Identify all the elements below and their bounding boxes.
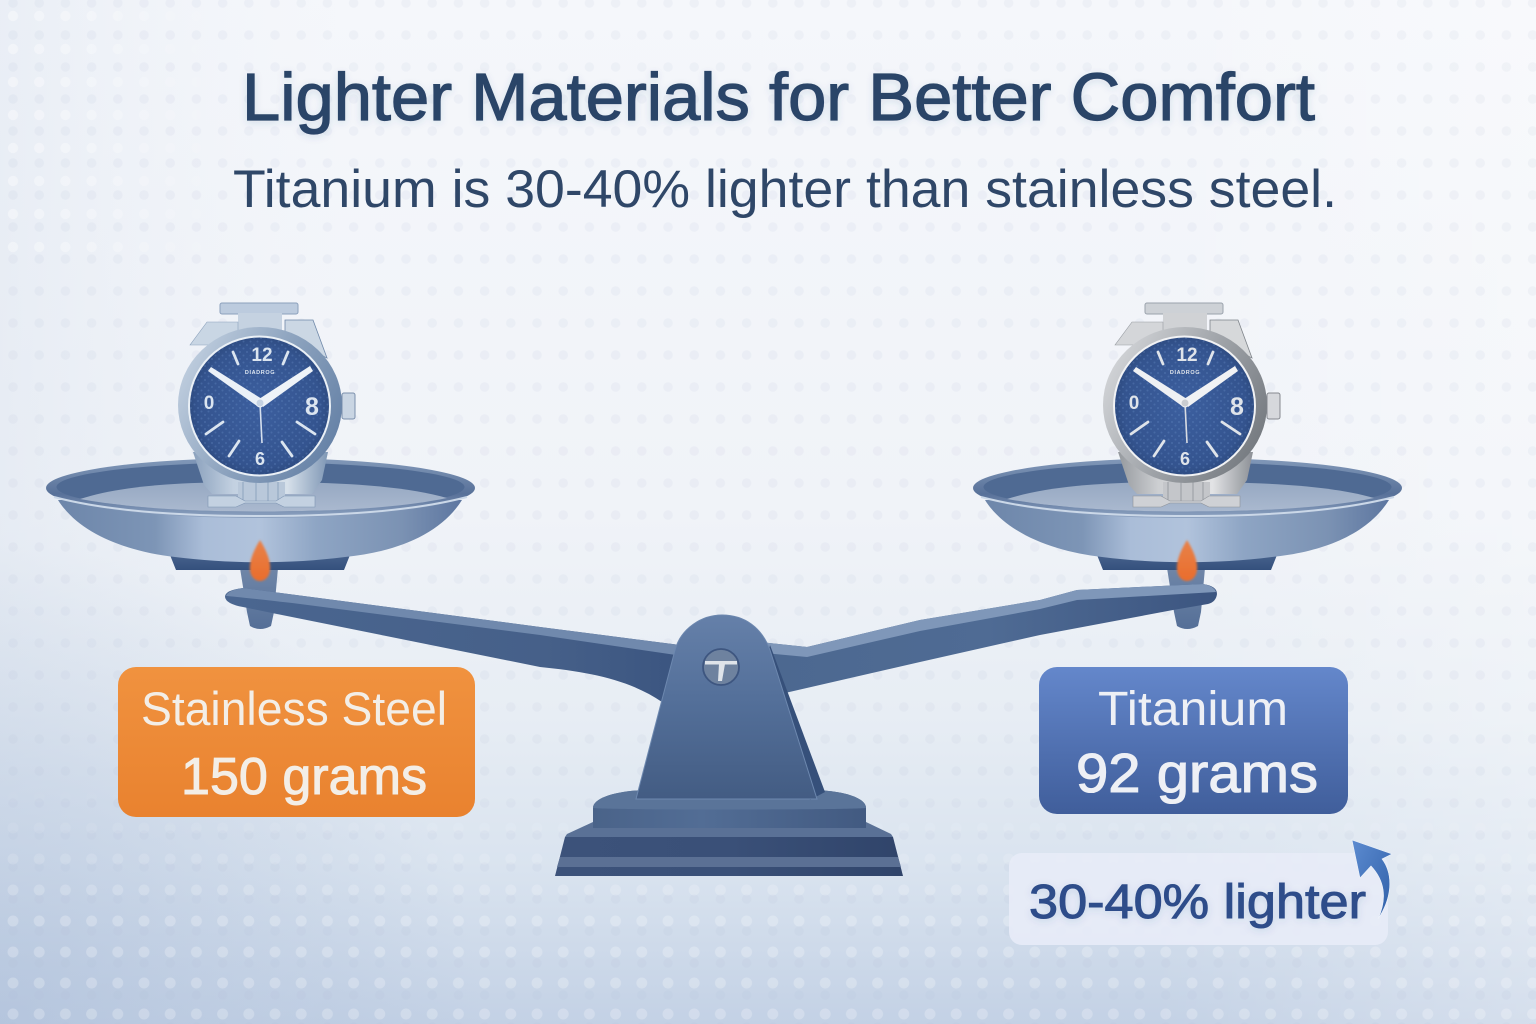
- right pan front lip: [981, 497, 1394, 516]
- right pan rim: [973, 458, 1402, 518]
- balance scale: [46, 303, 1402, 876]
- left pan front lip: [54, 497, 467, 516]
- column shadow side: [760, 645, 825, 800]
- bracelet top: [190, 303, 327, 358]
- left pan foot: [170, 555, 350, 570]
- left beam: [225, 588, 680, 702]
- titanium label: [1039, 667, 1348, 814]
- dial numerals: 0: [1129, 393, 1139, 414]
- upper plinth: [593, 790, 866, 828]
- dial numerals: 6: [255, 449, 265, 469]
- left pan stem: [240, 568, 278, 629]
- stainless steel watch: [178, 303, 355, 507]
- dial numerals: [1129, 345, 1244, 469]
- right pan stem: [1167, 568, 1205, 629]
- titanium watch: [1103, 303, 1280, 507]
- dial numerals: 8: [305, 393, 319, 421]
- watch hands: [1133, 366, 1238, 443]
- hour markers: [1131, 352, 1240, 456]
- crown: [342, 393, 355, 419]
- material name: Titanium: [1098, 683, 1288, 736]
- dial numerals: 12: [1176, 345, 1198, 366]
- watch hands: [208, 366, 313, 443]
- left pan floor: [80, 482, 447, 512]
- left flame pivot: [250, 540, 270, 581]
- dial: [1115, 338, 1254, 474]
- icon: up arrow: [1352, 840, 1392, 919]
- dial numerals: DIADROG: [245, 370, 275, 376]
- dial numerals: 12: [251, 345, 273, 366]
- weight: 92 grams: [1076, 742, 1318, 804]
- right pan foot: [1097, 555, 1277, 570]
- lighter callout: [1009, 840, 1392, 945]
- dial numerals: DIADROG: [1170, 370, 1200, 376]
- bracelet bottom: [193, 452, 328, 507]
- dial numerals: 8: [1230, 393, 1244, 421]
- material name: Stainless Steel: [141, 682, 447, 735]
- column: [636, 615, 817, 799]
- dial numerals: [204, 345, 319, 469]
- bracelet top: [1115, 303, 1252, 358]
- right pan floor: [1007, 482, 1374, 512]
- bracelet bottom: [1118, 452, 1253, 507]
- bezel: [178, 327, 342, 483]
- hour markers: [206, 352, 315, 456]
- dial numerals: 0: [204, 393, 214, 414]
- dial numerals: 6: [1180, 449, 1190, 469]
- subtitle: Titanium is 30-40% lighter than stainless steel.: [233, 160, 1337, 219]
- left pan bowl: [58, 500, 462, 562]
- lower plinth: [555, 822, 903, 876]
- scale base: [555, 615, 903, 876]
- weight: 150 grams: [181, 748, 427, 806]
- left pan inner: [56, 462, 464, 512]
- stainless steel label: [118, 667, 475, 817]
- callout text: 30-40% lighter: [1029, 876, 1366, 929]
- right flame pivot: [1177, 540, 1197, 581]
- title: Lighter Materials for Better Comfort: [242, 60, 1315, 135]
- bezel: [1103, 327, 1267, 483]
- left pan rim: [46, 458, 475, 518]
- dial: [190, 338, 329, 474]
- crown: [1267, 393, 1280, 419]
- right pan inner: [984, 462, 1392, 512]
- right pan bowl: [985, 500, 1389, 562]
- right pan with titanium watch: [973, 303, 1402, 629]
- right beam: [760, 584, 1217, 693]
- left pan with stainless steel watch: [46, 303, 475, 629]
- column pivot emblem: [703, 649, 739, 685]
